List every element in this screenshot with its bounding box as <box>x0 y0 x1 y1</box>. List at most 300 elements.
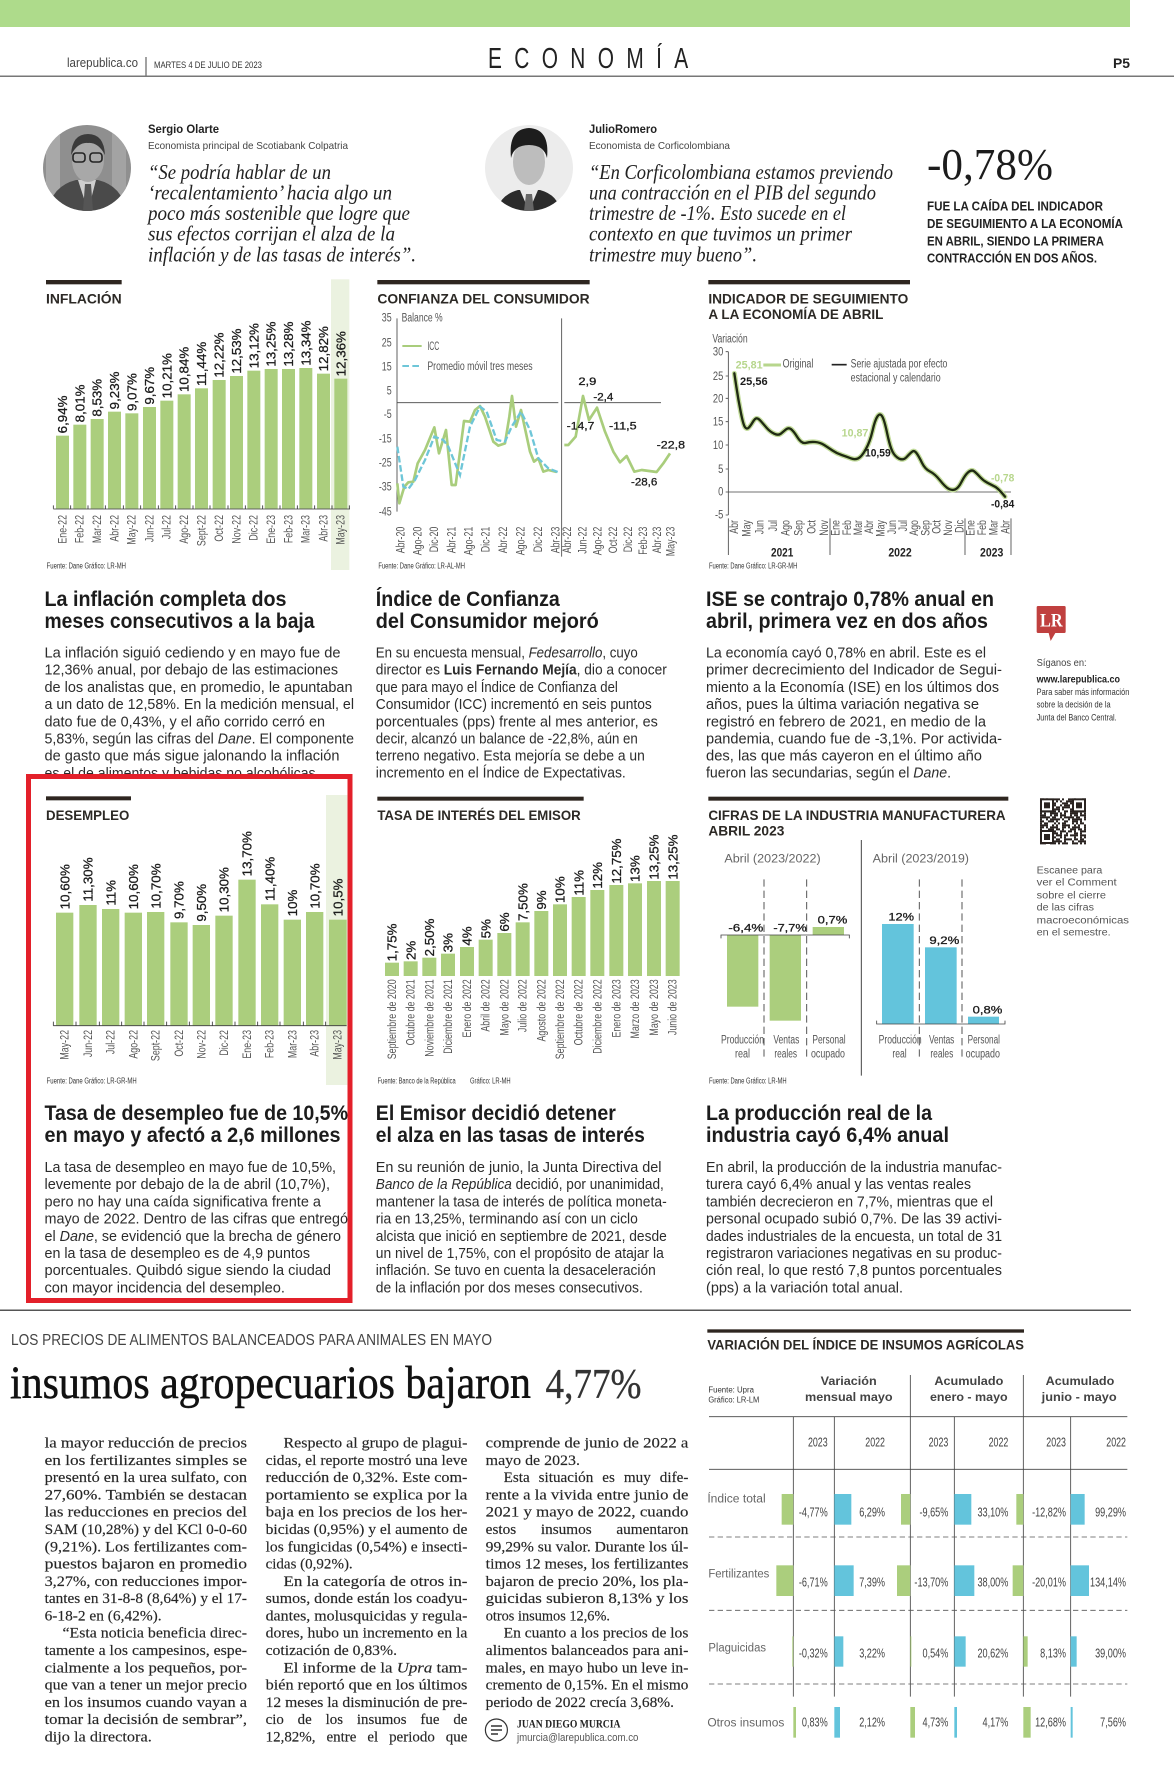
month labels: Dic-22 <box>622 527 635 552</box>
y axis labels: 20 <box>713 392 723 406</box>
value labels <box>385 834 680 961</box>
article: inflación: 12,36% anual, por debajo de las estimaciones <box>44 662 338 679</box>
month labels: Dic-22 <box>247 515 261 541</box>
value labels: 9,07% <box>124 373 139 411</box>
article column 3 <box>486 1436 689 1711</box>
panel: confianza del consumidor chart: Balance % <box>402 311 443 325</box>
panel: indicador de seguimiento chart: A LA ECONOMÍA DE ABRIL <box>708 306 884 322</box>
article column 2: En la categoría de otros in- <box>284 1574 468 1590</box>
article: confianza del consumidor <box>376 588 667 782</box>
panel: industria manufacturera chart: Abril (2023/2019) <box>873 852 969 866</box>
panel: indicador de seguimiento chart <box>708 280 1015 570</box>
article: confianza del consumidor: director es Luis Fernando Mejía, dio a conocer <box>376 662 667 679</box>
data labels: -22,8 <box>657 439 685 451</box>
article column 2: 12,82%, entre el periodo que <box>266 1730 467 1746</box>
row: fertilizantes <box>708 1565 1126 1596</box>
value labels: 10,84% <box>177 347 192 392</box>
article: confianza del consumidor: Consumidor (ICC) incrementó en seis puntos <box>376 696 652 713</box>
value labels: 8,53% <box>90 379 105 417</box>
column group headers: mensual mayo <box>805 1390 893 1404</box>
quote: Julio Romero: JulioRomero <box>589 122 657 136</box>
article: ISE: pandemia, cuando fue de -3,1%. Por activida- <box>706 730 1002 748</box>
month labels: Sept-22 <box>195 515 209 546</box>
data labels: 2,9 <box>578 376 596 388</box>
date labels: Octubre de 2022 <box>572 979 586 1045</box>
legend <box>402 339 533 373</box>
article: industria: industria cayó 6,4% anual <box>706 1124 949 1147</box>
article: inflación: meses consecutivos a la baja <box>44 610 315 633</box>
month labels: Abr <box>728 520 741 534</box>
value labels: 12,53% <box>229 328 244 374</box>
article: desempleo: en mayo y afectó a 2,6 millones <box>44 1124 340 1147</box>
side note: QR code: de las cifras <box>1037 903 1094 914</box>
value labels: 13,12% <box>246 323 261 368</box>
article column 3: estos insumos aumentaron <box>486 1522 689 1538</box>
month labels <box>56 515 348 546</box>
headline: insumos agropecuarios <box>10 1332 642 1409</box>
date labels: Enero de 2022 <box>461 979 474 1038</box>
month labels: Feb <box>976 520 989 535</box>
article: confianza del consumidor: Índice de Confianza <box>376 588 560 611</box>
value labels: 13,25% <box>647 834 662 880</box>
quote: Julio Romero: contexto en que tuvimos un primer <box>589 222 853 246</box>
column group headers: junio - mayo <box>1041 1390 1117 1404</box>
value labels: 9,70% <box>172 881 187 919</box>
page header: MARTES 4 DE JULIO DE 2023 <box>154 60 262 71</box>
article: emisor: de la inflación por dos meses consecutivos. <box>376 1279 643 1296</box>
y axis labels: -15 <box>379 432 392 446</box>
month labels: Dic-20 <box>428 527 441 552</box>
article column 1: que van a tener un mejor precio <box>45 1678 247 1694</box>
panel: indicador de seguimiento chart: INDICADOR DE SEGUIMIENTO <box>708 290 908 306</box>
month labels: Ene-22 <box>56 515 70 544</box>
article: ISE: fueron las secundarias, según el Dane. <box>706 764 951 782</box>
value labels: 9,23% <box>107 371 122 409</box>
side note: follow us: Para saber más información <box>1037 687 1129 697</box>
data labels: -2,4 <box>593 392 613 404</box>
category labels: Personal <box>968 1032 1000 1046</box>
month labels: Feb-22 <box>73 515 87 543</box>
y axis labels: 35 <box>382 311 392 325</box>
value labels <box>55 320 348 433</box>
date labels: Septiembre de 2020 <box>386 979 399 1059</box>
article: emisor: mantener la tasa de interés de política moneta- <box>376 1193 667 1210</box>
quote: Julio Romero: una contracción en el PIB del segundo <box>589 180 876 204</box>
date labels: Mayo de 2023 <box>648 979 661 1036</box>
month labels: Sep <box>919 520 933 536</box>
article: desempleo: en la tasa de desempleo es de 4,9 puntos <box>44 1245 310 1262</box>
article: industria: (pps) a la variación total anual. <box>706 1279 903 1296</box>
author byline: JUAN DIEGO MURCIA <box>517 1718 621 1730</box>
legend: Serie ajustada por efecto <box>851 357 948 371</box>
row: otros insumos: 4,17% <box>983 1716 1008 1730</box>
article: confianza del consumidor: En su encuesta mensual, Fedesarrollo, cuyo <box>376 644 638 662</box>
row: otros insumos: 4,73% <box>923 1716 949 1730</box>
data labels: -28,6 <box>631 477 657 489</box>
date labels <box>386 979 680 1059</box>
y axis labels: 25 <box>382 336 392 350</box>
article column 2: sumos, donde están los coadyu- <box>266 1591 468 1607</box>
data labels: 10,59 <box>865 448 891 460</box>
article column 1: dijo la directora. <box>45 1730 152 1746</box>
panel: industria manufacturera chart <box>708 797 1008 1086</box>
month labels: Jun-22 <box>143 515 157 542</box>
row: otros insumos: 2,12% <box>859 1716 885 1730</box>
category labels: Ventas <box>773 1032 799 1046</box>
article: inflación: es el de alimentos y bebidas no alcohólicas. <box>44 765 320 782</box>
article: desempleo: Tasa de desempleo fue de 10,5% <box>44 1102 348 1125</box>
article column 3: otros insumos 12,6%. <box>486 1608 610 1624</box>
month labels: Jun-22 <box>82 1030 95 1057</box>
category labels: Ventas <box>929 1032 954 1046</box>
year headers: 2022 <box>865 1436 885 1450</box>
panel: inflación chart: Fuente: Dane Gráfico: LR-MH <box>47 562 126 571</box>
quote: Julio Romero: trimestre muy bueno”. <box>589 242 757 266</box>
article: desempleo: pero no hay una caída significativa frente a <box>44 1193 322 1210</box>
article column 3: 2021 y mayo de 2022, cuando <box>486 1505 688 1521</box>
quote: Julio Romero: trimestre de -1%. Esto sucede en el <box>589 201 846 225</box>
month labels: Abr-23 <box>317 515 331 542</box>
month labels: Ene <box>829 520 843 536</box>
date labels: Marzo de 2023 <box>629 979 642 1039</box>
panel: industria manufacturera chart: CIFRAS DE LA INDUSTRIA MANUFACTURERA <box>708 807 1006 823</box>
month labels: May-23 <box>664 527 678 556</box>
article column 2: portamiento se explica por la <box>266 1487 468 1503</box>
date labels: Octubre de 2021 <box>404 979 418 1045</box>
month labels: Oct-22 <box>173 1030 186 1057</box>
article: ISE: miento a la Economía (ISE) en los últimos dos <box>706 679 999 696</box>
quote: Sergio Olarte <box>43 122 416 266</box>
value labels: 13,70% <box>240 831 255 876</box>
section divider <box>0 1310 1131 1311</box>
y axis labels: 15 <box>713 416 723 429</box>
y axis labels: 5 <box>387 384 392 398</box>
article: emisor: Banco de la República decidió, por unanimidad, <box>376 1176 664 1193</box>
article column 1: tomar la decisión de sembrar”, <box>45 1712 247 1728</box>
article: inflación: de gasto que más sigue jalonando la inflación <box>44 748 340 765</box>
value labels: 10% <box>553 876 568 903</box>
quote: Sergio Olarte: sus efectos corrijan el alza de la <box>148 222 395 246</box>
month labels: Sep <box>792 520 806 536</box>
side note: follow us <box>1036 606 1129 723</box>
article column 1: presentó en la urea sulfato, con <box>45 1470 248 1486</box>
panel: confianza del consumidor chart: Fuente: Dane Gráfico: LR-AL-MH <box>378 561 465 570</box>
column group headers: enero - mayo <box>930 1390 1008 1404</box>
data labels: 25,56 <box>740 376 768 388</box>
article column 1: en los insumos cuando vayan a <box>45 1695 248 1711</box>
month labels: Abr <box>863 520 876 534</box>
month labels: Jun <box>753 520 767 534</box>
row: índice total: 99,29% <box>1095 1506 1126 1520</box>
article: industria: personal ocupado subió 0,7%. De las 39 activi- <box>706 1211 1002 1228</box>
date labels: Agosto de 2022 <box>535 979 549 1041</box>
side note: QR code <box>1037 799 1129 939</box>
article: confianza del consumidor: incremento en el Índice de Expectativas. <box>376 764 626 782</box>
value labels: 12,36% <box>333 331 348 376</box>
article column 1: puestos bajaron en promedio <box>45 1557 247 1573</box>
month labels: Abr-23 <box>549 527 563 553</box>
article: desempleo: el Dane, se evidenció que la brecha de género <box>44 1228 341 1245</box>
category labels: Producción <box>879 1032 922 1046</box>
value labels: 3% <box>441 933 456 952</box>
legend: Original <box>783 357 813 371</box>
article column 1: SAM (10,28%) y del KCl 0-0-60 <box>45 1522 247 1538</box>
month labels: Mar <box>852 520 865 535</box>
row: índice total: 6,29% <box>859 1506 885 1520</box>
row: plaguicidas: 39,00% <box>1095 1647 1126 1661</box>
bar chart: abril 2023/2019 <box>877 912 1005 1024</box>
article: emisor: alcista que inició en septiembre de 2021, desde <box>376 1228 667 1245</box>
icon: speech bubble <box>485 1719 507 1741</box>
category labels: reales <box>774 1047 797 1061</box>
article: ISE: La economía cayó 0,78% en abril. Este es el <box>706 644 986 662</box>
month labels: Mar <box>987 520 1001 535</box>
legend: estacional y calendario <box>851 371 941 385</box>
key figure callout: EN ABRIL, SIENDO LA PRIMERA <box>927 234 1104 248</box>
month labels: Ago <box>908 520 921 536</box>
icon: portrait Sergio Olarte <box>43 125 131 211</box>
row: otros insumos: 12,68% <box>1035 1716 1066 1730</box>
article column 3: timos 12 meses, los fertilizantes <box>486 1557 689 1573</box>
article column 2: reducción de 0,32%. Este com- <box>266 1470 468 1486</box>
side note: follow us: Junta del Banco Central. <box>1037 713 1117 723</box>
month labels: Oct-22 <box>213 515 226 542</box>
value labels: 5% <box>478 919 493 938</box>
value labels: 11% <box>103 880 118 906</box>
month labels: Abr-20 <box>394 527 408 553</box>
date labels: Diciembre de 2021 <box>442 979 455 1054</box>
date labels: Enero de 2023 <box>610 979 624 1038</box>
month labels: May-23 <box>334 515 348 545</box>
article column 3: En cuanto a los precios de los <box>504 1626 689 1642</box>
data labels: 25,81 <box>736 359 763 371</box>
article: ISE: registró en febrero de 2021, en medio de la <box>706 713 987 730</box>
month labels: Nov-22 <box>195 1030 209 1059</box>
panel: desempleo chart <box>26 774 352 1304</box>
article column 1: las reducciones en precios del <box>45 1505 247 1521</box>
y axis labels: -25 <box>379 456 392 470</box>
article column 3: cremento de 0,15%. En el mismo <box>486 1678 688 1694</box>
category labels: real <box>735 1047 750 1061</box>
year headers: 2022 <box>989 1436 1008 1450</box>
page header <box>0 42 1174 77</box>
icon: portrait Julio Romero <box>485 125 573 211</box>
month labels <box>58 1030 345 1061</box>
value labels: 9,50% <box>194 884 209 922</box>
bar chart: abril 2023/2019: 0,8% <box>973 1004 1002 1016</box>
value labels: 12,75% <box>609 838 624 884</box>
author byline: jmurcia@larepublica.com.co <box>516 1732 638 1744</box>
panel: industria manufacturera chart: Abril (2023/2022) <box>724 852 821 866</box>
category labels: ocupado <box>966 1047 1000 1061</box>
value labels: 10% <box>285 890 300 916</box>
month labels: Jun-22 <box>576 527 590 554</box>
article column 3: alimentos balanceados para ani- <box>486 1643 689 1659</box>
row: plaguicidas: 0,54% <box>923 1647 949 1661</box>
column group headers: Variación <box>821 1374 877 1388</box>
article column 1: la mayor reducción de precios <box>45 1436 247 1452</box>
article column 2: cidas (0,92%). <box>266 1557 353 1573</box>
article: inflación: 5,83%, según las cifras del Dane. El componente <box>44 730 354 748</box>
page header: P5 <box>1113 55 1130 71</box>
side note: QR code: ver el Comment <box>1037 878 1117 889</box>
side note: QR code: Escanee para <box>1037 865 1103 876</box>
article column 3: guicidas subieron 8,13% y los <box>486 1591 689 1607</box>
line: ICC long series <box>397 396 557 503</box>
article column 1: (9,21%). Los fertilizantes com- <box>45 1539 247 1555</box>
panel: desempleo chart: DESEMPLEO <box>46 807 129 823</box>
article: desempleo: mayo de 2022. Dentro de las cifras que entregó <box>44 1211 348 1228</box>
article: industria: En abril, la producción de la industria manufac- <box>706 1159 1002 1176</box>
y axis labels: -5 <box>384 408 392 421</box>
panel: variación del índice de insumos agrícolas: Gráfico: LR-LM <box>708 1395 759 1404</box>
article: ISE <box>706 588 1002 782</box>
article: desempleo: con mayor incidencia del desempleo. <box>44 1279 285 1296</box>
top green band <box>0 0 1130 27</box>
article: confianza del consumidor: porcentuales (pps) frente al mes anterior, es <box>376 713 658 730</box>
value labels: 13,28% <box>281 321 296 367</box>
month labels: Dic-22 <box>532 527 545 552</box>
row: fertilizantes: -6,71% <box>799 1576 828 1590</box>
month labels: Jul <box>897 520 910 531</box>
value labels: 8,01% <box>72 384 87 422</box>
date labels: Mayo de 2022 <box>498 979 512 1036</box>
headline: insumos agropecuarios: LOS PRECIOS DE ALIMENTOS BALANCEADOS PARA ANIMALES EN MAYO <box>11 1332 492 1349</box>
month labels: Abr-22 <box>561 527 574 553</box>
month labels: Jul-22 <box>160 515 174 539</box>
month labels <box>394 527 678 556</box>
headline: insumos agropecuarios: insumos agropecuarios bajaron <box>10 1357 531 1409</box>
line: adjusted series <box>734 373 1005 497</box>
value labels: 12,82% <box>316 326 331 371</box>
value labels: 10,60% <box>57 864 72 909</box>
month labels: Dic-22 <box>218 1030 231 1056</box>
column group headers: Acumulado <box>1046 1374 1114 1388</box>
month labels: May <box>740 519 754 537</box>
bar chart: abril 2023/2022: -7,7% <box>773 923 807 935</box>
month labels: Sept-22 <box>149 1030 163 1061</box>
article: inflación: La inflación siguió cediendo y en mayo fue de <box>44 644 340 662</box>
row: índice total: -4,77% <box>799 1506 828 1520</box>
value labels: 1,75% <box>385 923 400 961</box>
bar chart: abril 2023/2022: -6,4% <box>728 923 763 935</box>
panel: tasa de interés chart: Fuente: Banco de la República <box>378 1077 456 1086</box>
month labels: Nov <box>942 519 955 536</box>
month labels: Ene-23 <box>265 515 278 544</box>
year headers: 2022 <box>1106 1436 1126 1450</box>
month labels: Abr <box>999 520 1013 534</box>
article column 2: los fungicidas (0,54%) e insecti- <box>266 1539 468 1555</box>
red highlight frame <box>28 776 350 1300</box>
month labels: Oct <box>805 520 819 534</box>
y axis labels: -45 <box>379 505 392 519</box>
category labels: ocupado <box>811 1047 845 1061</box>
data labels: -11,5 <box>609 420 637 432</box>
row: fertilizantes: 7,39% <box>859 1576 885 1590</box>
month labels: Ago-22 <box>514 527 528 555</box>
panel: inflación chart <box>46 279 350 571</box>
bar chart: inflación <box>56 368 347 509</box>
value labels: 11,44% <box>194 342 209 386</box>
row: índice total <box>707 1490 1126 1525</box>
quote: Sergio Olarte: poco más sostenible que logre que <box>146 201 410 225</box>
year labels: 2022 <box>888 546 912 560</box>
article column 3: 99,29% su valor. Durante los úl- <box>486 1539 689 1555</box>
row: plaguicidas: 3,22% <box>859 1647 885 1661</box>
value labels: 10,60% <box>126 864 141 909</box>
y axis labels <box>713 346 723 522</box>
side note: follow us: www.larepublica.co <box>1036 675 1120 686</box>
year labels <box>771 546 1004 560</box>
y axis labels: 25 <box>713 370 723 383</box>
article: inflación: dato fue de 0,43%, y el año corrido cerró en <box>44 713 325 730</box>
month labels: Abr-22 <box>108 515 122 542</box>
value labels: 12,22% <box>212 332 227 378</box>
article column 1: en los fertilizantes simples se <box>45 1453 247 1469</box>
value labels: 2% <box>403 941 418 960</box>
date labels: Junio de 2023 <box>666 979 680 1035</box>
data labels <box>567 376 685 489</box>
y axis labels: -5 <box>715 508 723 522</box>
category labels: reales <box>930 1047 953 1061</box>
y axis labels: 30 <box>713 346 723 359</box>
panel: indicador de seguimiento chart: Fuente: Dane Gráfico: LR-GR-MH <box>709 561 797 570</box>
month labels: May-22 <box>125 515 139 545</box>
month labels: Ago-20 <box>411 527 425 555</box>
article column 1: 3,27%, con reducciones impor- <box>45 1574 247 1590</box>
article: industria: también decrecieron en 7,7%, mientras que el <box>706 1193 993 1210</box>
month labels: Mar-23 <box>286 1030 300 1058</box>
bar chart: abril 2023/2019: 9,2% <box>929 935 959 947</box>
article: confianza del consumidor: decir, alcanzó un balance de -22,8%, aún en <box>376 730 638 748</box>
legend: ICC <box>427 339 440 353</box>
column group headers <box>805 1374 1117 1404</box>
article column 3: mayo de 2023. <box>486 1453 580 1469</box>
month labels: Feb-23 <box>637 527 650 555</box>
month labels: Abr-23 <box>651 527 664 553</box>
panel: inflación chart: INFLACIÓN <box>46 289 122 306</box>
value labels: 4% <box>460 926 475 946</box>
article column 3: rente a la vivida entre junio de <box>486 1487 688 1503</box>
panel: tasa de interés chart <box>377 797 680 1086</box>
month labels: Ago-22 <box>127 1030 141 1059</box>
bar chart: desempleo <box>56 880 347 1025</box>
article column 2: cotización de 0,83%. <box>266 1643 397 1659</box>
article column 3: males, en mayo hubo un leve in- <box>486 1660 689 1676</box>
icon: QR code <box>1040 799 1086 843</box>
article: emisor: El Emisor decidió detener <box>376 1102 616 1125</box>
article: emisor: En su reunión de junio, la Junta Directiva del <box>376 1159 662 1176</box>
panel: indicador de seguimiento chart: Variación <box>712 332 748 346</box>
quote: Julio Romero <box>485 122 893 266</box>
value labels: 7,50% <box>515 883 530 921</box>
key figure callout: CONTRACCIÓN EN DOS AÑOS. <box>927 250 1097 266</box>
article: emisor <box>376 1102 667 1296</box>
panel: tasa de interés chart: TASA DE INTERÉS DEL EMISOR <box>377 807 581 823</box>
article: confianza del consumidor: del Consumidor mejoró <box>376 610 599 633</box>
row: plaguicidas <box>708 1636 1126 1667</box>
month labels: Ene <box>964 520 978 536</box>
legend: Promedio móvil tres meses <box>427 359 533 373</box>
article column 2: cio de los insumos fue de <box>266 1712 467 1728</box>
article column 1: “Esta noticia beneficia direc- <box>62 1626 247 1642</box>
quote: Sergio Olarte: Sergio Olarte <box>148 122 219 136</box>
article column 1: tantes en 31-8-8 (8,64%) y el 17- <box>45 1591 247 1607</box>
page header: larepublica.co <box>67 55 138 70</box>
article: inflación: de los analistas que, en promedio, le apuntaban <box>44 679 352 696</box>
month labels: Oct-22 <box>607 527 620 553</box>
year labels: 2023 <box>980 546 1004 560</box>
